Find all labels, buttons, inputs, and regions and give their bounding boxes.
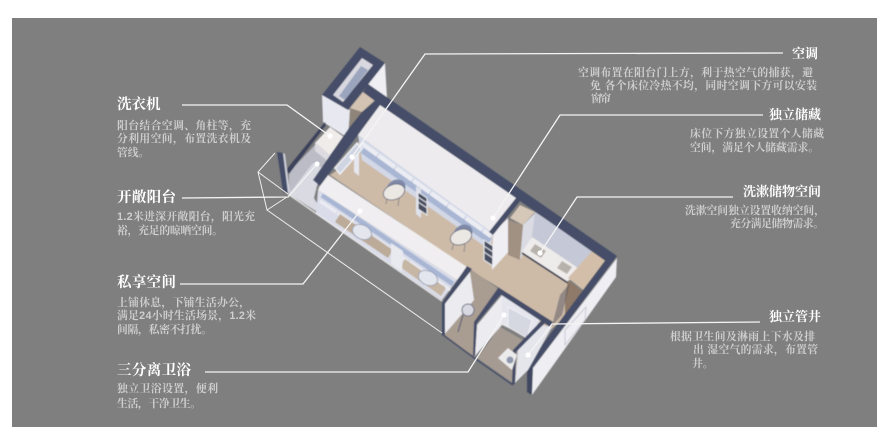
leader dots xyxy=(314,133,543,358)
callout: 独立管井: 根据卫生间及淋雨上下水及排 xyxy=(670,329,815,343)
callout: 独立管井 xyxy=(670,309,821,370)
callout: 开敞阳台: 开敞阳台 xyxy=(117,188,176,206)
outer walls xyxy=(313,84,617,395)
callout: 洗衣机: 洗衣机 xyxy=(117,95,161,113)
callout: 三分离卫浴 xyxy=(117,361,218,410)
callout: 洗漱储物空间: 洗漱空间独立设置收纳空间， xyxy=(685,203,825,217)
callout: 三分离卫浴: 生活，干净卫生。 xyxy=(117,396,201,410)
callout: 私享空间 xyxy=(117,273,256,336)
callout: 洗漱储物空间: 充分满足储物需求。 xyxy=(730,216,824,230)
callout: 独立储藏: 空间，满足个人储藏需求。 xyxy=(690,140,819,154)
callout: 独立管井: 井。 xyxy=(692,356,714,370)
callout: 私享空间: 满足24小时生活场景，1.2米 xyxy=(117,308,256,322)
stools: upper row xyxy=(381,176,476,252)
upper bunk row xyxy=(354,135,510,270)
callout: 空调: 免 各个床位冷热不均，同时空调下方可以安装 xyxy=(590,78,817,92)
callout: 洗衣机: 分利用空间，布置洗衣机及 xyxy=(117,131,251,145)
bunk ladder xyxy=(418,192,493,266)
callout: 私享空间: 私享空间 xyxy=(117,273,176,291)
callout: 独立管井: 出 湿空气的需求，布置管 xyxy=(693,342,818,356)
open balcony xyxy=(277,122,344,217)
callout: 空调 xyxy=(578,46,818,105)
callout: 空调: 空调布置在阳台门上方，利于热空气的捕获，避 xyxy=(578,65,813,79)
washroom vanity and storage xyxy=(508,205,607,326)
callout: 三分离卫浴: 三分离卫浴 xyxy=(117,361,192,379)
toilet room xyxy=(473,287,553,385)
callout: 独立储藏 xyxy=(690,107,824,154)
wireframe balcony outline xyxy=(258,153,442,333)
lower bunk row xyxy=(288,190,457,301)
callout: 空调: 窗帘 xyxy=(591,91,611,105)
tower storage cabinet xyxy=(349,92,375,136)
callout: 洗衣机: 阳台结合空调、角柱等，充 xyxy=(117,118,251,132)
callout: 开敞阳台: 裕，充足的晾晒空间。 xyxy=(117,223,223,237)
callout: 洗衣机: 管线。 xyxy=(117,145,149,159)
wall-mounted air conditioner xyxy=(335,143,362,174)
callout: 独立储藏: 独立储藏 xyxy=(769,107,821,122)
callout: 私享空间: 间隔，私密不打扰。 xyxy=(117,322,212,336)
bunk top slabs xyxy=(318,105,520,280)
shower room xyxy=(442,266,500,357)
leader lines xyxy=(180,53,783,372)
callout: 三分离卫浴: 独立卫浴设置，便利 xyxy=(117,381,218,395)
wood floor xyxy=(330,140,570,332)
callout: 独立储藏: 床位下方独立设置个人储藏 xyxy=(690,126,824,140)
callout: 开敞阳台 xyxy=(117,188,255,237)
isometric dormitory model xyxy=(277,47,617,395)
callout: 开敞阳台: 1.2米进深开敞阳台，阳光充 xyxy=(117,209,255,223)
shaft tower xyxy=(322,47,387,138)
callout: 私享空间: 上铺休息，下铺生活办公， xyxy=(117,295,250,309)
callout: 洗衣机 xyxy=(117,95,251,159)
callout: 洗漱储物空间 xyxy=(685,184,825,230)
exterior window xyxy=(565,307,586,345)
callout: 洗漱储物空间: 洗漱储物空间 xyxy=(743,184,821,199)
callout: 独立管井: 独立管井 xyxy=(769,309,821,324)
callout: 空调: 空调 xyxy=(792,46,818,61)
